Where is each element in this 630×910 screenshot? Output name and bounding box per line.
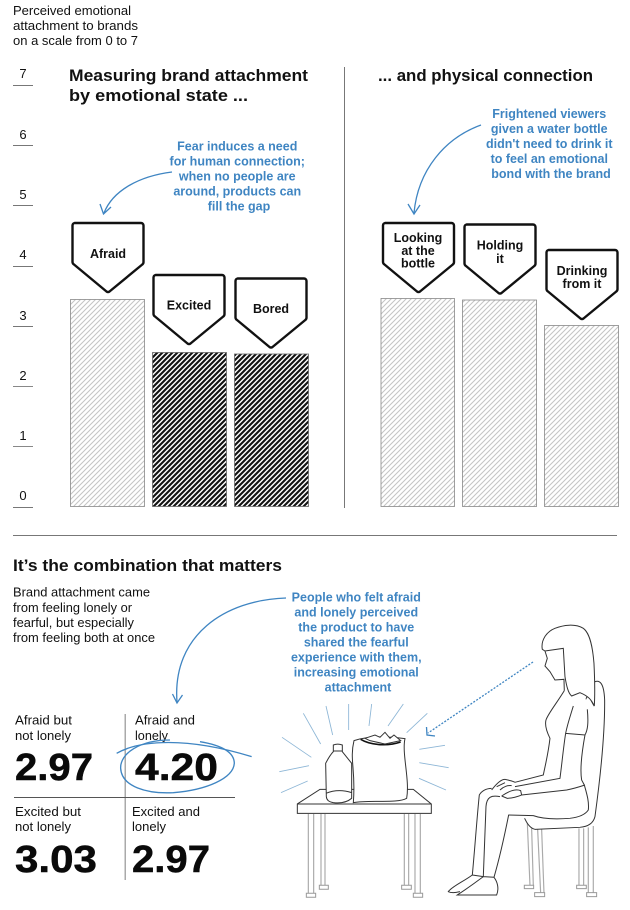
bar: looking at the bottle bbox=[381, 223, 454, 506]
annotation: frightened viewers: Frightened viewers bbox=[492, 107, 606, 121]
illustration: table with bottle and bag bbox=[279, 704, 449, 897]
hands bbox=[492, 779, 522, 798]
bar: excited: Excited bbox=[167, 298, 211, 312]
annotation: fear: fill the gap bbox=[208, 200, 271, 214]
cell: afraid but not lonely: 2.97 bbox=[15, 747, 93, 789]
bar: looking at the bottle: Looking bbox=[394, 231, 442, 245]
cell: afraid and lonely: 4.20 bbox=[135, 747, 218, 789]
annotation: frightened viewers: didn't need to drink it bbox=[486, 137, 613, 151]
bar: looking at the bottle: bottle bbox=[401, 256, 435, 270]
body text: from feeling lonely or bbox=[13, 601, 132, 615]
cell: excited and lonely: Excited and bbox=[132, 805, 200, 819]
bar: drinking from it bbox=[544, 250, 618, 506]
body bbox=[448, 691, 590, 895]
cell: afraid but not lonely: not lonely bbox=[15, 729, 72, 743]
annotation: afraid and lonely: the product to have bbox=[298, 620, 414, 634]
heading: emotional state: by emotional state ... bbox=[69, 86, 248, 105]
y axis scale bbox=[13, 66, 33, 508]
torso and arms bbox=[508, 691, 594, 819]
bar: bored: Bored bbox=[253, 302, 289, 316]
y axis scale: 5 bbox=[19, 187, 27, 202]
annotation: afraid and lonely: People who felt afraid bbox=[292, 590, 421, 604]
hair and face bbox=[542, 625, 595, 706]
table bbox=[297, 789, 431, 897]
bottle bbox=[326, 744, 352, 803]
annotation: fear: when no people are bbox=[178, 170, 296, 184]
annotation: afraid and lonely: and lonely perceived bbox=[294, 606, 418, 620]
cell: afraid and lonely: lonely bbox=[135, 729, 169, 743]
results grid bbox=[14, 714, 235, 881]
cell: afraid but not lonely bbox=[15, 714, 93, 789]
bar: excited bbox=[152, 275, 226, 506]
illustration: seated woman bbox=[448, 625, 605, 897]
annotation: fear: around, products can bbox=[173, 184, 301, 198]
bar: holding it: it bbox=[496, 252, 505, 266]
arrow: fear annotation to bar bbox=[100, 172, 172, 214]
bag bbox=[352, 732, 407, 803]
cell: excited but not lonely: not lonely bbox=[15, 820, 72, 834]
heading: emotional state bbox=[69, 66, 308, 105]
axis title bbox=[13, 4, 138, 48]
annotation: afraid and lonely: experience with them, bbox=[291, 650, 422, 664]
y axis scale: 3 bbox=[19, 308, 27, 323]
y axis scale: 4 bbox=[19, 247, 27, 262]
bar: drinking from it: from it bbox=[563, 277, 602, 291]
bar: drinking from it: Drinking bbox=[557, 264, 607, 278]
heading: physical connection: ... and physical connection bbox=[378, 66, 593, 85]
cell: excited but not lonely bbox=[15, 805, 97, 881]
cell: afraid and lonely: Afraid and bbox=[135, 714, 195, 728]
axis title: on a scale from 0 to 7 bbox=[13, 34, 138, 48]
section heading: It’s the combination that matters bbox=[13, 556, 282, 575]
bar: holding it bbox=[462, 224, 536, 506]
body text bbox=[13, 586, 155, 645]
y axis scale: 2 bbox=[19, 368, 27, 383]
cell: excited and lonely: 2.97 bbox=[132, 839, 210, 881]
heading: emotional state: Measuring brand attachment bbox=[69, 66, 308, 85]
body text: Brand attachment came bbox=[13, 586, 150, 600]
bar: bored bbox=[234, 278, 308, 506]
y axis scale: 7 bbox=[19, 66, 27, 81]
annotation: afraid and lonely: attachment bbox=[325, 680, 392, 694]
bar: looking at the bottle: at the bbox=[401, 244, 435, 258]
annotation: afraid and lonely: increasing emotional bbox=[294, 666, 419, 680]
axis title: attachment to brands bbox=[13, 19, 138, 33]
legs and shoes bbox=[448, 788, 509, 895]
hand-drawn circle around 4.20 bbox=[117, 740, 252, 793]
cell: excited but not lonely: Excited but bbox=[15, 805, 82, 819]
dotted arrow: gaze to product bbox=[426, 662, 533, 736]
arrow: annotation to 4.20 bbox=[172, 598, 286, 703]
body text: from feeling both at once bbox=[13, 631, 155, 645]
annotation: frightened viewers: to feel an emotional bbox=[491, 152, 608, 166]
rays bbox=[279, 704, 449, 793]
annotation: fear: Fear induces a need bbox=[177, 140, 297, 154]
axis title: Perceived emotional bbox=[13, 4, 131, 18]
bar: holding it: Holding bbox=[477, 238, 523, 252]
cell: afraid but not lonely: Afraid but bbox=[15, 714, 73, 728]
cell: afraid and lonely bbox=[135, 714, 218, 789]
cell: excited and lonely: lonely bbox=[132, 820, 167, 834]
cell: excited but not lonely: 3.03 bbox=[15, 839, 97, 881]
y axis scale: 0 bbox=[19, 488, 27, 503]
bar: afraid: Afraid bbox=[90, 247, 126, 261]
annotation: frightened viewers: given a water bottle bbox=[491, 122, 608, 136]
bar: afraid bbox=[70, 223, 144, 506]
y axis scale: 6 bbox=[19, 127, 27, 142]
y axis scale: 1 bbox=[19, 428, 27, 443]
arrow: frightened annotation to bar bbox=[408, 125, 481, 214]
body text: fearful, but especially bbox=[13, 616, 135, 630]
cell: excited and lonely bbox=[132, 805, 210, 881]
chair bbox=[524, 681, 605, 897]
annotation: frightened viewers: bond with the brand bbox=[491, 167, 611, 181]
annotation: afraid and lonely: shared the fearful bbox=[304, 636, 409, 650]
annotation: fear: for human connection; bbox=[170, 154, 305, 168]
